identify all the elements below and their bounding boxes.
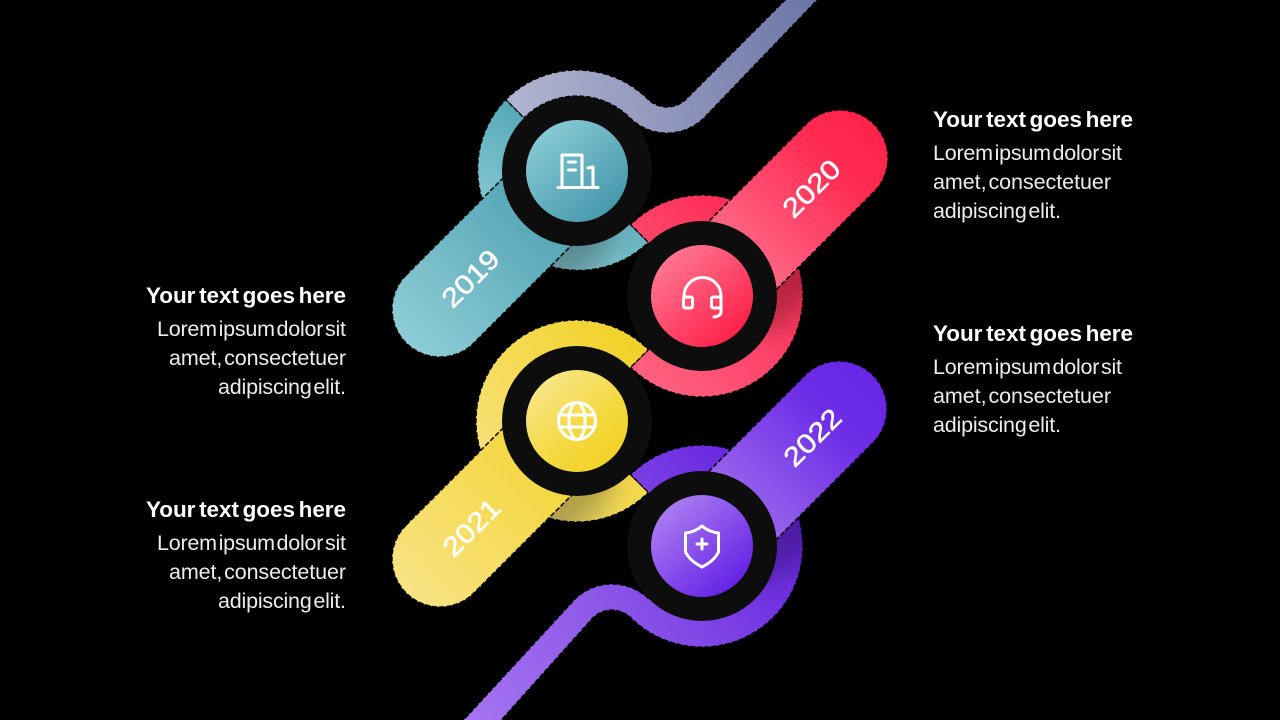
year label 2019: 2019 — [436, 244, 506, 314]
icon: shield plus — [686, 526, 718, 567]
step 2020 — [627, 90, 908, 397]
text block: upper left — [146, 283, 346, 399]
text block: lower left — [146, 497, 346, 613]
year pill 2021 — [372, 388, 611, 627]
year pill 2022 — [667, 341, 907, 581]
text block: upper left: Your text goes here — [146, 283, 346, 308]
text block: top right — [933, 107, 1133, 223]
icon disc 2019 — [526, 120, 628, 222]
dark circle 2022 — [627, 471, 777, 621]
text block: upper left: amet, consectetuer — [169, 346, 346, 370]
ring arc 2019 — [478, 100, 648, 270]
text block: top right: Your text goes here — [933, 107, 1133, 132]
year label 2021: 2021 — [437, 493, 507, 563]
step 2021 — [372, 320, 652, 627]
text block: lower left: Your text goes here — [146, 497, 346, 522]
text block: lower left: adipiscing elit. — [218, 589, 346, 613]
year label 2020: 2020 — [777, 154, 847, 224]
year label 2022: 2022 — [778, 403, 848, 473]
dark circle 2019 — [502, 96, 652, 246]
text block: lower right: adipiscing elit. — [933, 413, 1061, 437]
text block: lower right: amet, consectetuer — [933, 384, 1111, 408]
text block: lower left: amet, consectetuer — [169, 560, 346, 584]
icon disc 2020 — [651, 245, 753, 347]
text block: top right: amet, consectetuer — [933, 170, 1111, 194]
icon: building — [558, 155, 598, 188]
step 2022 — [458, 341, 907, 720]
ring arc and bottom ribbon — [458, 445, 803, 720]
dark circle 2021 — [502, 346, 652, 496]
text block: lower right — [933, 321, 1133, 437]
icon: headset — [684, 278, 721, 317]
ring arc 2021 — [476, 320, 648, 522]
text block: lower right: Your text goes here — [933, 321, 1133, 346]
text block: lower left: Lorem ipsum dolor sit — [157, 531, 346, 555]
icon disc 2021 — [526, 370, 628, 472]
text block: top right: adipiscing elit. — [933, 199, 1061, 223]
text block: upper left: Lorem ipsum dolor sit — [157, 317, 346, 341]
text block: upper left: adipiscing elit. — [218, 375, 346, 399]
year pill 2019 — [372, 138, 611, 377]
top ribbon — [506, 0, 823, 133]
icon: globe — [558, 402, 596, 440]
dark circle 2020 — [627, 221, 777, 371]
step 2019 — [372, 0, 823, 377]
icon disc 2022 — [651, 495, 753, 597]
text block: lower right: Lorem ipsum dolor sit — [933, 355, 1122, 379]
year pill 2020 — [668, 90, 908, 330]
text block: top right: Lorem ipsum dolor sit — [933, 141, 1122, 165]
ring arc 2020 — [631, 195, 803, 397]
